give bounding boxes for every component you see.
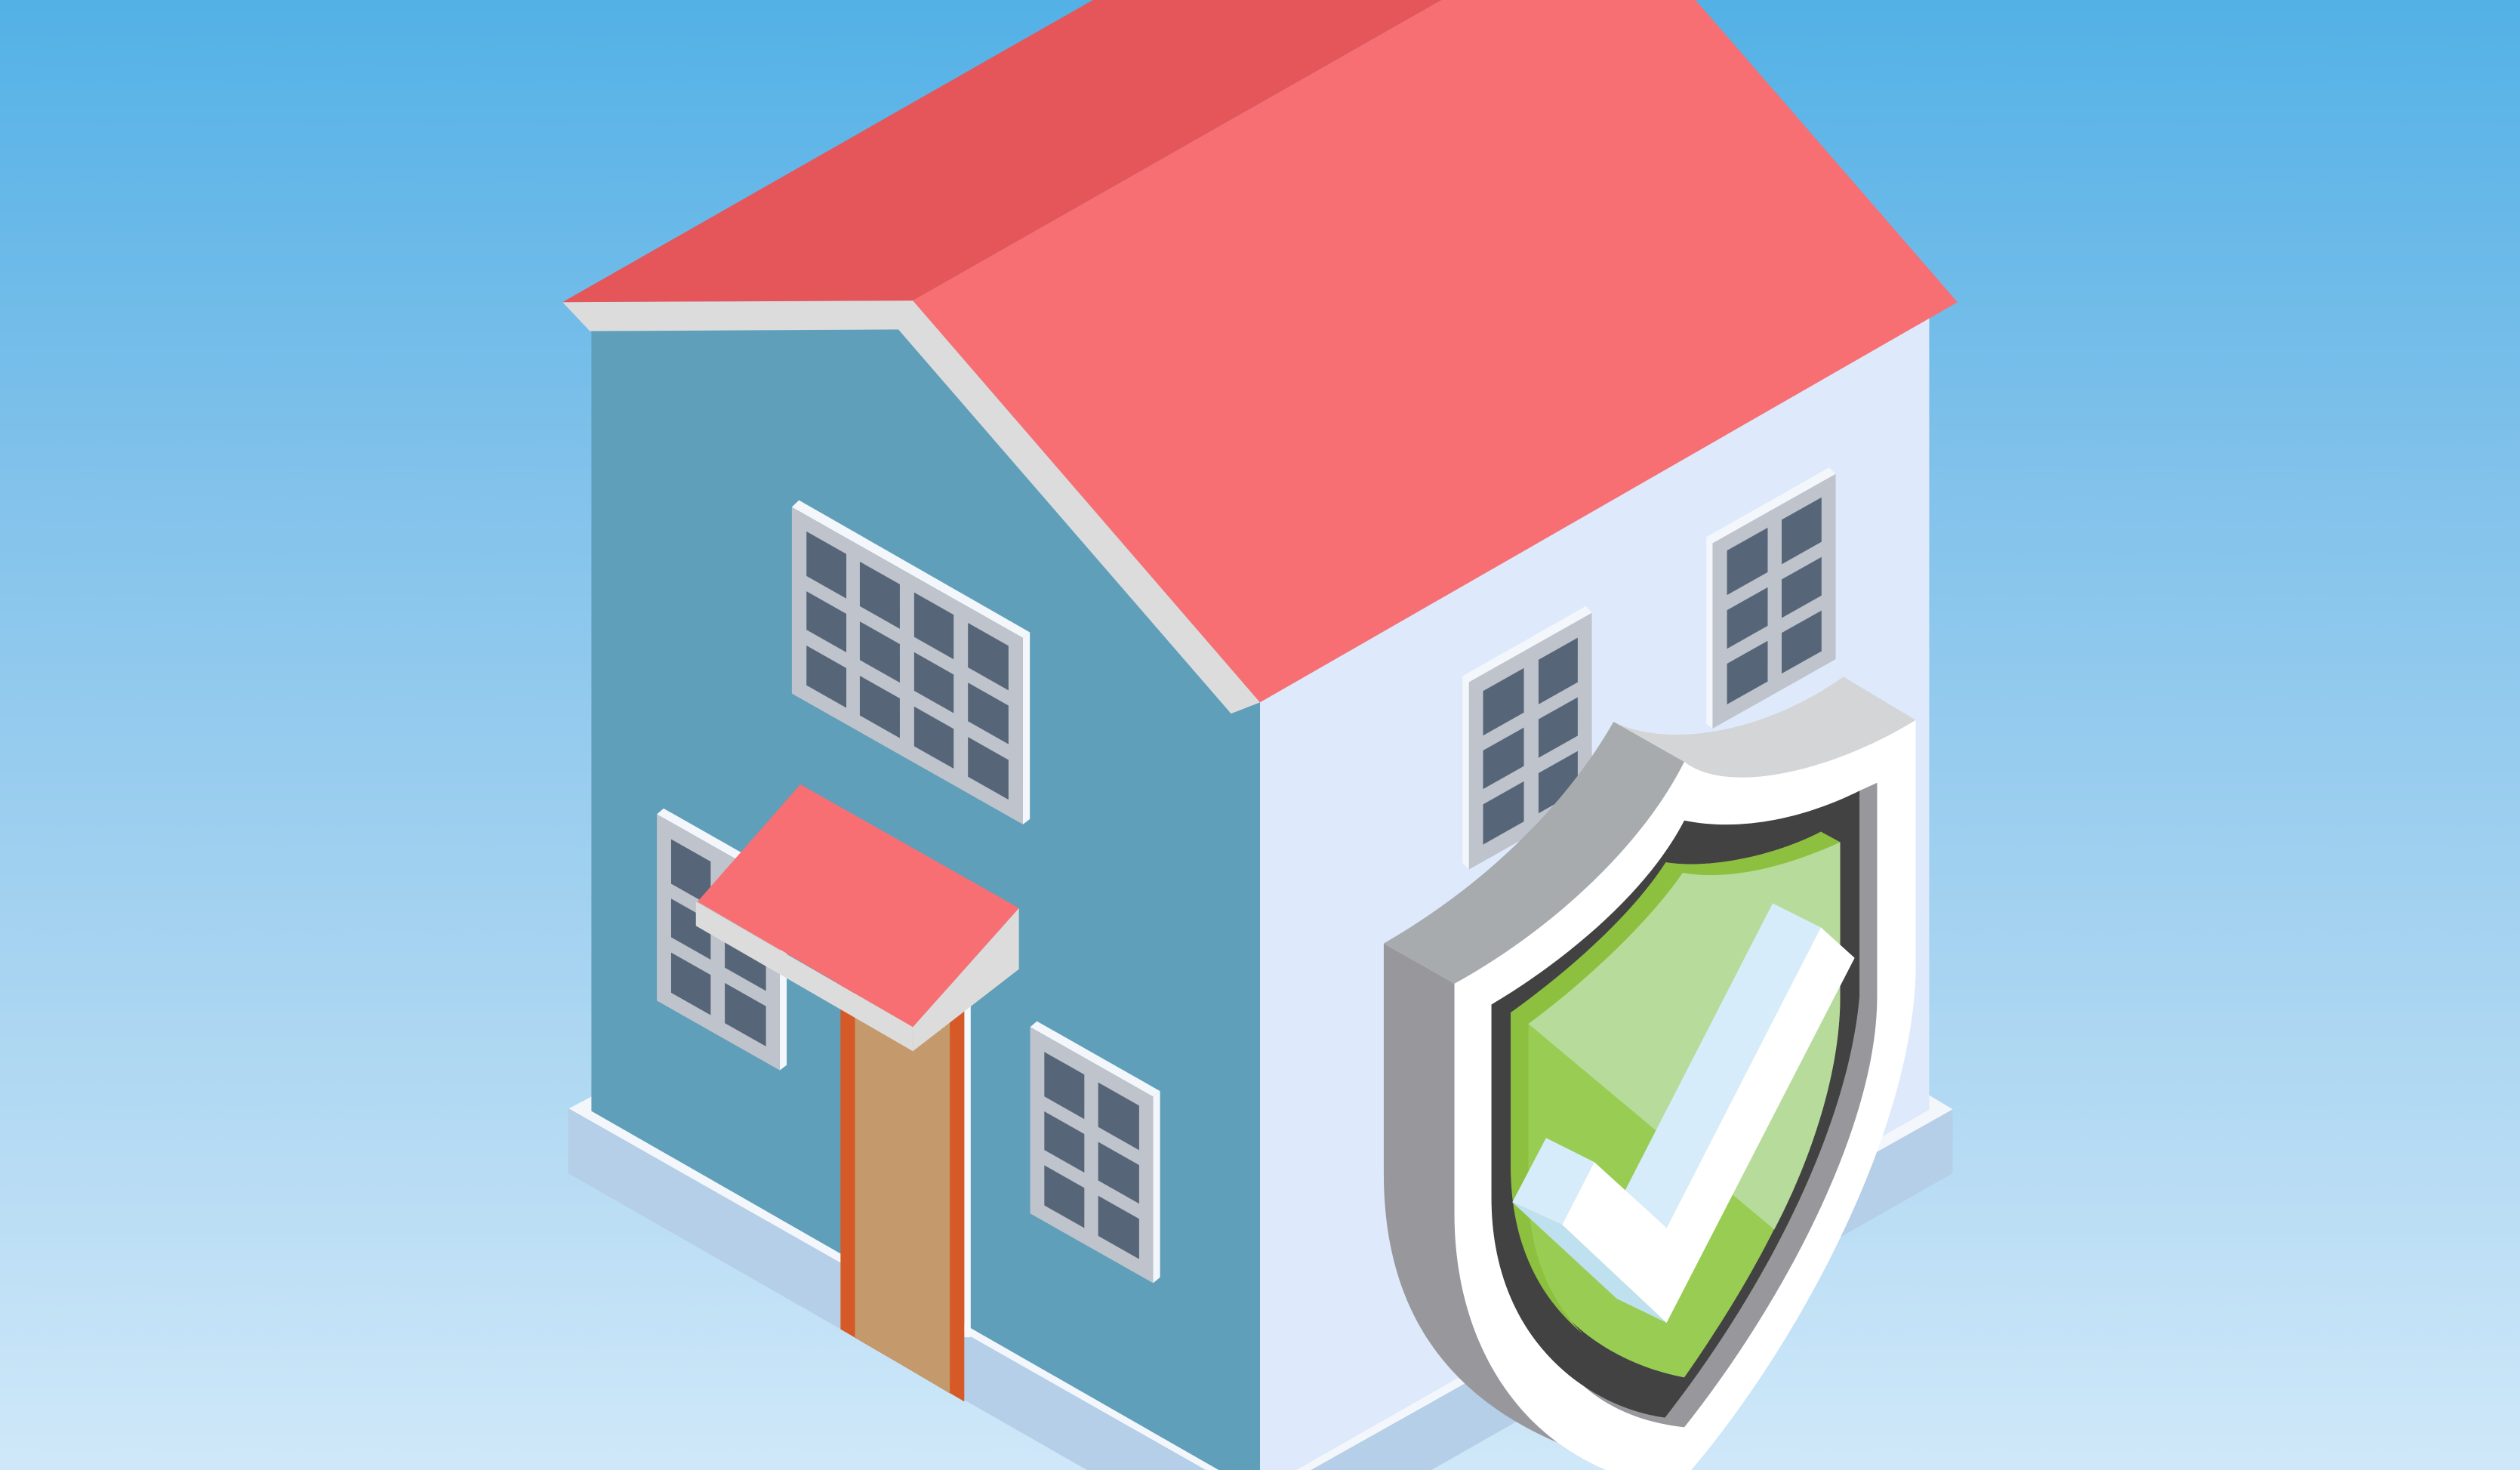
roof eave underside (562, 300, 1260, 713)
check mark (1512, 903, 1855, 1323)
canopy: front edge (696, 901, 913, 1051)
shield: dark green top band (1511, 832, 1841, 1334)
shield (1384, 676, 1916, 1470)
slab: right side (1295, 1109, 1953, 1470)
door (840, 981, 971, 1401)
house (562, 0, 1958, 1470)
check: short arm top (1512, 1138, 1594, 1225)
ground slab (568, 1096, 1953, 1470)
wall: right pale (1260, 319, 1929, 1470)
shield: side extrusion (1384, 944, 1607, 1470)
shield: inner grey bevel (1583, 783, 1877, 1427)
window: right wall lower (1462, 602, 1592, 873)
canopy: side (913, 908, 1019, 1051)
window: right wall upper (1706, 464, 1836, 732)
check: white face (1562, 927, 1855, 1323)
check: underside (1512, 1202, 1667, 1323)
porch canopy (696, 784, 1019, 1051)
door: orange frame (840, 981, 964, 1401)
shield: white face (1455, 720, 1916, 1470)
shield: dark rim (1492, 790, 1859, 1418)
window: upper left wall (792, 496, 1030, 828)
window: lower right of left wall (1030, 1018, 1160, 1287)
shield: green field (1511, 832, 1841, 1377)
slab: right white edge (1286, 1096, 1953, 1470)
shield: light green highlight (1529, 842, 1841, 1230)
door: white jamb (964, 981, 971, 1337)
slab: left side (568, 1109, 1260, 1470)
check: long arm top (1625, 903, 1821, 1228)
slab: left white edge (569, 1096, 1260, 1470)
roof: main slope (913, 0, 1958, 702)
wall: left blue (591, 329, 1260, 1470)
roof: dark slope (562, 0, 1442, 302)
shield: top left extrusion (1384, 722, 1684, 984)
door: tan panel (855, 981, 950, 1394)
canopy: roof (698, 784, 1019, 1027)
window: lower left wall, behind porch (657, 805, 787, 1074)
shield: top right extrusion (1613, 676, 1916, 778)
